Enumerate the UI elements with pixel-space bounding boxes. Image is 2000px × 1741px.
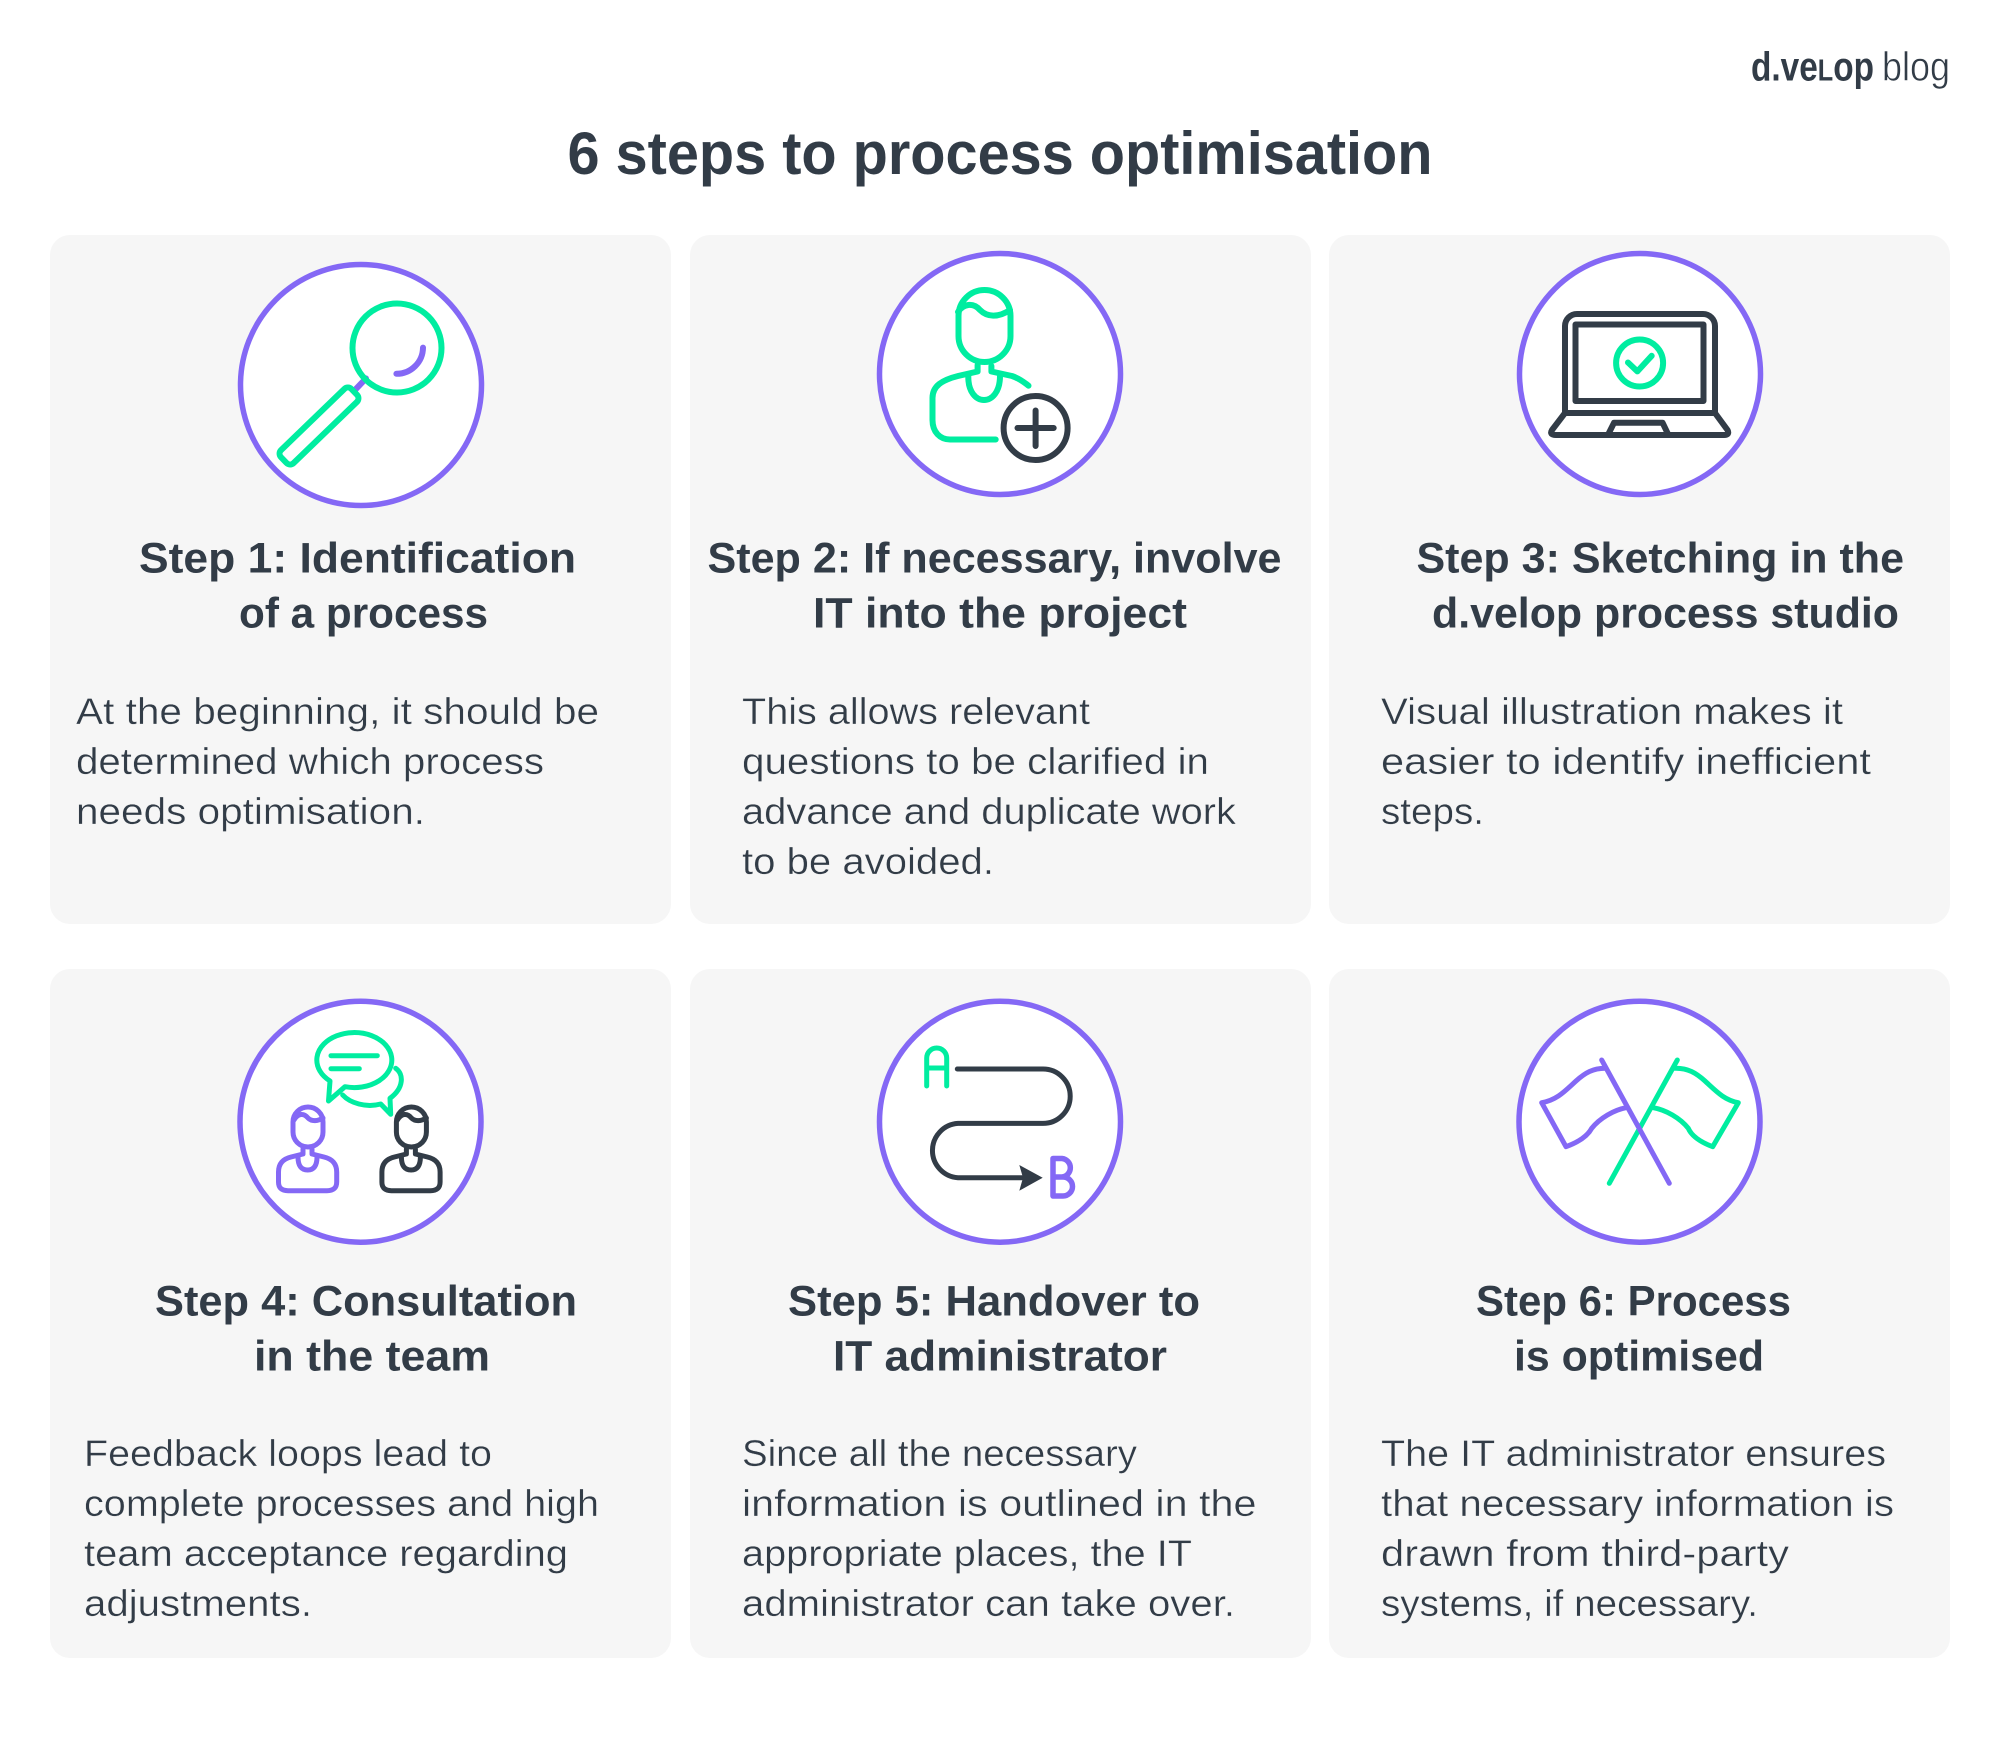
body text: needs optimisation.: [76, 791, 425, 832]
body text: to be avoided.: [742, 841, 994, 882]
icon: two people with speech bubbles: [240, 1001, 481, 1242]
card background: [1329, 235, 1950, 924]
body text: [1381, 1433, 1894, 1624]
heading: [708, 534, 1282, 638]
body text: team acceptance regarding: [84, 1533, 568, 1574]
body text: drawn from third-party: [1381, 1533, 1790, 1574]
body text: determined which process: [76, 741, 544, 782]
heading: IT administrator: [833, 1332, 1167, 1380]
heading: Step 2: If necessary, involve: [708, 534, 1282, 582]
panel: step 3: [1329, 235, 1950, 924]
heading: d.velop process studio: [1432, 590, 1899, 638]
logo: d.velop blog: [1751, 44, 1950, 90]
body text: Visual illustration makes it: [1381, 691, 1844, 732]
heading: Step 5: Handover to: [788, 1278, 1200, 1326]
body text: steps.: [1381, 791, 1484, 832]
panel: step 1: [50, 235, 671, 924]
logo: d.velop blog: blog: [1882, 44, 1950, 90]
icon: magnifying glass: [240, 264, 482, 506]
body text: adjustments.: [84, 1583, 312, 1624]
body text: Since all the necessary: [742, 1433, 1138, 1474]
title: 6 steps to process optimisation: [568, 120, 1432, 187]
heading: IT into the project: [813, 590, 1187, 638]
body text: [742, 1433, 1256, 1624]
panel: step 4: [50, 969, 671, 1658]
body text: [1381, 691, 1872, 832]
card background: [50, 235, 671, 924]
card background: [1329, 969, 1950, 1658]
body text: appropriate places, the IT: [742, 1533, 1192, 1574]
heading: in the team: [254, 1332, 490, 1380]
heading: [1476, 1278, 1791, 1380]
heading: [155, 1278, 577, 1380]
card background: [690, 235, 1311, 924]
icon: crossed flags: [1519, 1001, 1760, 1242]
body text: questions to be clarified in: [742, 741, 1209, 782]
body text: [76, 691, 599, 832]
heading: [788, 1278, 1200, 1380]
body text: At the beginning, it should be: [76, 691, 599, 732]
panel: step 5: [690, 969, 1311, 1658]
card background: [50, 969, 671, 1658]
heading: [139, 534, 576, 638]
body text: advance and duplicate work: [742, 791, 1237, 832]
body text: This allows relevant: [742, 691, 1091, 732]
body text: systems, if necessary.: [1381, 1583, 1758, 1624]
body text: The IT administrator ensures: [1381, 1433, 1886, 1474]
panel: step 6: [1329, 969, 1950, 1658]
body text: complete processes and high: [84, 1483, 599, 1524]
card background: [690, 969, 1311, 1658]
heading: Step 1: Identification: [139, 534, 576, 582]
body text: [84, 1433, 599, 1624]
body text: information is outlined in the: [742, 1483, 1256, 1524]
icon: route from A to B: [880, 1001, 1120, 1242]
body text: easier to identify inefficient: [1381, 741, 1872, 782]
panel: step 2: [690, 235, 1311, 924]
body text: Feedback loops lead to: [84, 1433, 492, 1474]
heading: is optimised: [1514, 1332, 1764, 1380]
heading: [1416, 534, 1904, 638]
body text: administrator can take over.: [742, 1583, 1235, 1624]
body text: that necessary information is: [1381, 1483, 1894, 1524]
icon: laptop with check: [1520, 254, 1760, 494]
icon: person with plus: [880, 254, 1120, 494]
heading: Step 4: Consultation: [155, 1278, 577, 1326]
logo: d.velop blog: d.veLop: [1751, 44, 1874, 90]
body text: [742, 691, 1237, 882]
heading: Step 6: Process: [1476, 1278, 1791, 1326]
heading: of a process: [239, 590, 488, 638]
heading: Step 3: Sketching in the: [1416, 534, 1904, 582]
